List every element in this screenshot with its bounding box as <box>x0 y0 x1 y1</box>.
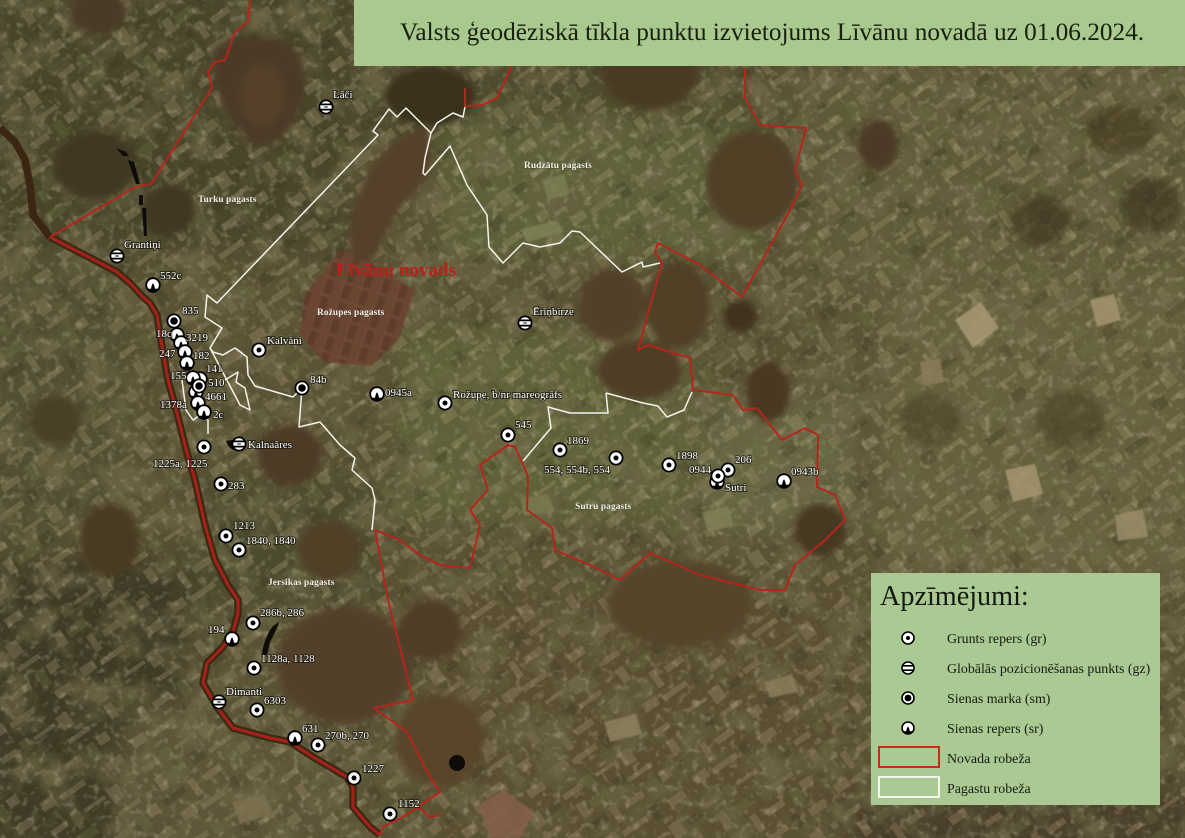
point labels: 270b, 270 <box>325 730 370 742</box>
point labels: 545 <box>515 419 532 431</box>
point labels: Rožupe, b/nr mareogrāfs <box>453 389 562 401</box>
point labels: 182 <box>193 350 210 362</box>
point labels: 1378a <box>160 399 187 411</box>
black water bodies <box>116 148 465 771</box>
parish and municipality names: Rožupes pagasts <box>317 308 385 318</box>
point labels: 510 <box>208 377 225 389</box>
title banner <box>354 0 1185 66</box>
parish and municipality names: Turku pagasts <box>198 195 257 205</box>
point labels: Dimanti <box>226 686 262 698</box>
point labels: 1869 <box>567 435 590 447</box>
point labels: Kalnaāres <box>248 439 292 451</box>
point labels: 1840, 1840 <box>246 535 296 547</box>
point labels: 84b <box>310 374 327 386</box>
point labels: 0945a <box>385 387 412 399</box>
legend icon: gps punkts <box>901 661 915 675</box>
point labels: 1128a, 1128 <box>261 653 315 665</box>
parish and municipality names: Rudzātu pagasts <box>524 161 592 171</box>
legend panel <box>871 573 1160 805</box>
legend swatch: pagastu robeža <box>878 776 940 798</box>
pagastu robeža <box>182 107 692 530</box>
point labels: 552c <box>160 270 182 282</box>
point labels: 141 <box>206 363 222 375</box>
point labels: 1152 <box>398 798 420 810</box>
point labels: Grantiņi <box>124 239 161 251</box>
point labels: 155 <box>170 370 187 382</box>
legend text: sienas repers: Sienas repers (sr) <box>947 722 1043 737</box>
point labels: 3219 <box>186 332 208 344</box>
parish and municipality names: Jersikas pagasts <box>268 578 335 588</box>
title banner: Valsts ģeodēziskā tīkla punktu izvietojums Līvānu novadā uz 01.06.2024. <box>400 18 1144 46</box>
point labels: 1225a, 1225 <box>153 458 208 470</box>
point labels: 206 <box>735 454 752 466</box>
municipality label: Līvānu novads <box>336 260 456 281</box>
point labels: 1213 <box>233 520 256 532</box>
point labels: 835 <box>182 305 199 317</box>
point labels: 247 <box>159 348 176 360</box>
legend text: grunts repers: Grunts repers (gr) <box>947 632 1047 647</box>
parish and municipality names: Sutru pagasts <box>575 502 632 512</box>
legend text: novada robeža: Novada robeža <box>947 752 1031 767</box>
ground benchmark 0944 <box>711 469 725 483</box>
point labels: 554, 554b, 554 <box>544 464 610 476</box>
legend text: sienas marka: Sienas marka (sm) <box>947 692 1050 707</box>
point labels: 631 <box>302 723 318 735</box>
point labels: 1898 <box>676 450 698 462</box>
point labels: 4661 <box>205 391 227 403</box>
point labels: 194 <box>208 624 225 636</box>
wall marks <box>167 314 309 395</box>
legend text: gps punkts: Globālās pozicionēšanas punkts (gz) <box>947 662 1150 677</box>
point labels: 0943b <box>791 466 819 478</box>
point labels: 286b, 286 <box>260 607 304 619</box>
point labels: 6303 <box>264 695 286 707</box>
legend swatch: novada robeža <box>878 746 940 768</box>
point labels: Sutri <box>725 482 746 494</box>
wall benchmarks <box>146 278 791 745</box>
legend icon: grunts repers <box>901 631 915 645</box>
legend icon: sienas repers <box>901 721 915 735</box>
point labels: 0944 <box>689 464 712 476</box>
point labels: 1227 <box>362 763 384 775</box>
point labels: 283 <box>228 480 245 492</box>
legend text: pagastu robeža: Pagastu robeža <box>947 782 1031 797</box>
point labels: Kalvāni <box>267 335 302 347</box>
novada robeža <box>50 0 845 835</box>
light farmland <box>232 17 1148 838</box>
point labels: 18c <box>156 328 172 340</box>
point labels: 2c <box>213 409 224 421</box>
ground benchmarks <box>197 343 735 821</box>
gps points <box>110 100 532 709</box>
peat extraction area <box>300 250 415 366</box>
point labels: Lāči <box>333 89 353 101</box>
legend icon: sienas marka <box>901 691 915 705</box>
point labels: Ērīņbirze <box>533 306 574 318</box>
legend heading: Apzīmējumi: <box>880 581 1029 612</box>
